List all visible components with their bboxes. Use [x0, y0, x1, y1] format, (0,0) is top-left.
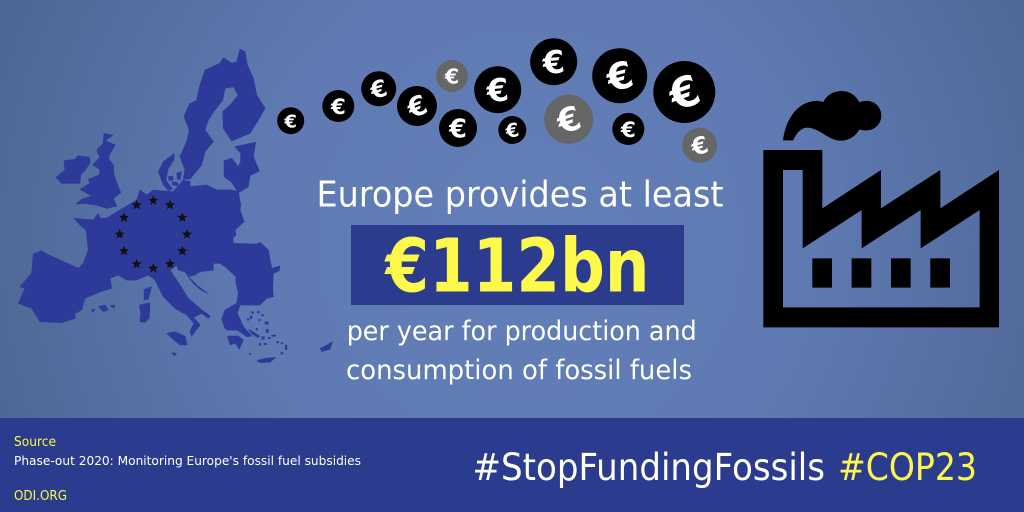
icon: euro coins stream: €	[540, 44, 566, 82]
icon: euro coins stream: €	[402, 89, 432, 125]
map: Baltic states	[224, 142, 259, 193]
headline: Europe provides at least	[316, 174, 724, 216]
subtitle text	[346, 316, 697, 386]
subtitle text: per year for production and	[347, 316, 697, 347]
icon: ring of EU stars	[115, 195, 192, 273]
map: Ireland	[56, 156, 90, 183]
figure: €112bn: €112bn	[384, 224, 650, 310]
factory windows	[812, 258, 950, 288]
icon: euro coins stream: €	[551, 98, 586, 142]
icon: euro coins stream: €	[484, 72, 510, 110]
map: western Mediterranean islands	[91, 287, 152, 323]
footer banner	[0, 418, 1024, 512]
hashtag: StopFundingFossils: #StopFundingFossils	[472, 445, 825, 489]
source title: Phase-out 2020: Monitoring Europe's fossil fuel subsidies	[14, 453, 361, 468]
icon: euro coins stream: €	[503, 119, 521, 143]
map: Sweden and Finland	[180, 49, 265, 179]
hashtag: COP23: #COP23	[838, 445, 977, 489]
subtitle text: consumption of fossil fuels	[346, 355, 692, 386]
icon: euro coins stream: €	[444, 65, 459, 89]
map: mainland continental Europe	[18, 180, 280, 337]
highlighted figure box	[351, 224, 684, 310]
source label: Source	[14, 435, 56, 450]
map of Europe	[18, 49, 333, 363]
icon: euro coins stream: €	[601, 53, 638, 101]
factory building	[763, 150, 999, 327]
icon: euro coins stream: €	[620, 118, 636, 143]
icon: factory	[763, 91, 999, 327]
icon: euro coins stream: €	[330, 95, 346, 120]
map: Denmark	[158, 153, 182, 191]
factory smoke	[783, 91, 881, 141]
icon: euro coins stream: €	[283, 111, 297, 132]
icon: euro coins stream: €	[662, 65, 707, 121]
icon: euro coins stream: €	[687, 130, 711, 162]
icon: euro coins stream: €	[448, 114, 467, 144]
icon: euro coins stream	[277, 38, 717, 163]
website: ODI.ORG	[14, 489, 67, 504]
map: Sicily, Greece and Aegean islands	[167, 311, 333, 363]
map: Britain	[76, 133, 121, 208]
icon: euro coins stream: €	[366, 74, 390, 105]
